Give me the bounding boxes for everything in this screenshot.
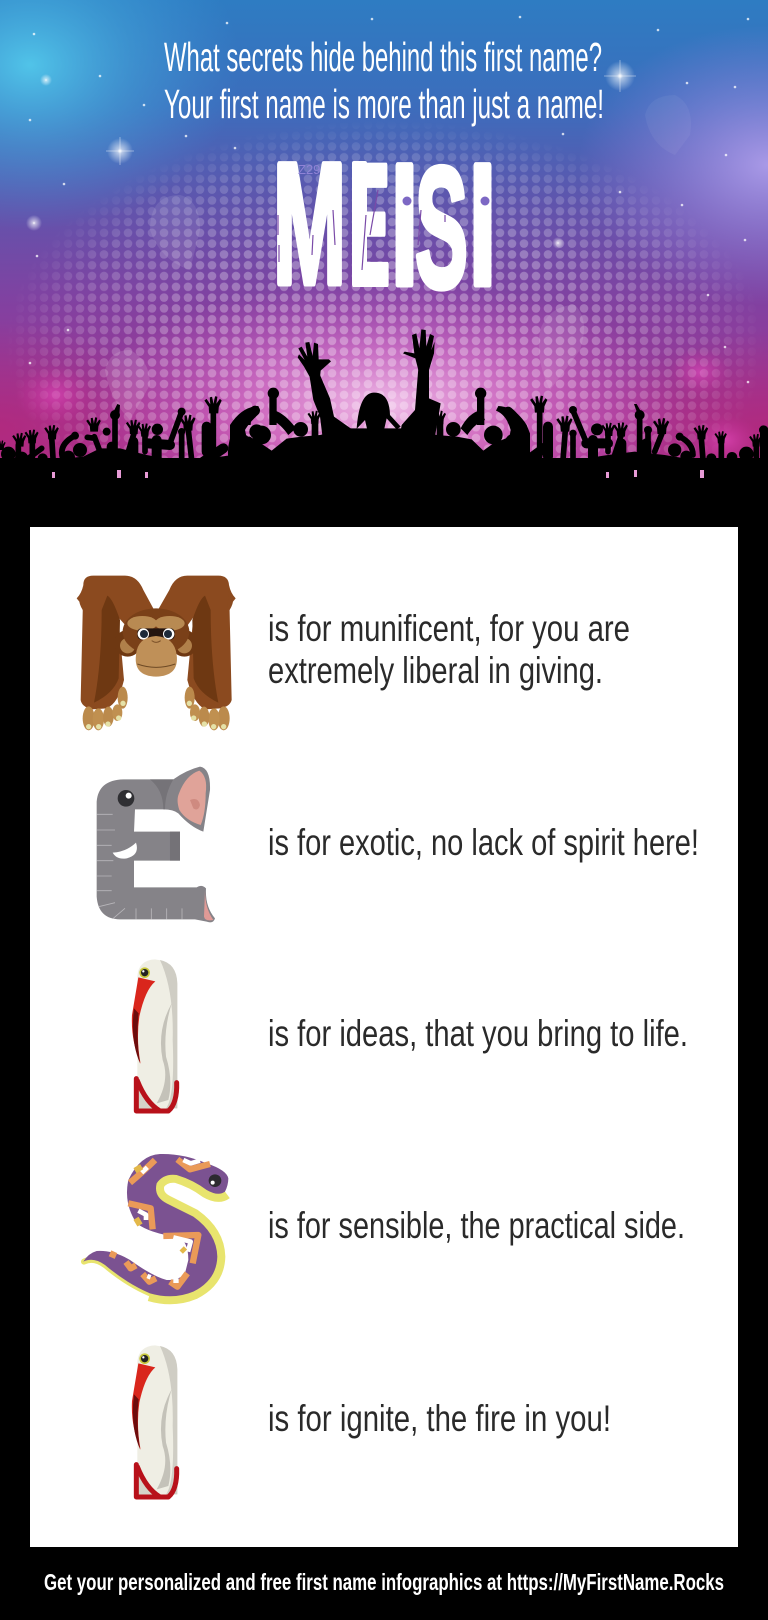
background: concert stage glow (0, 0, 768, 458)
icon: snake letter S (83, 1154, 228, 1296)
crowd left side (0, 396, 264, 480)
title: name MEISI: M (273, 128, 346, 320)
icon: ibis letter I (132, 959, 177, 1111)
title: name MEISI: Z29 (298, 162, 320, 177)
text: I meaning (ignite): is for ignite, the fire in you! (268, 1398, 611, 1439)
title: name MEISI: I (391, 129, 418, 321)
icon: monkey letter M (77, 576, 236, 730)
text: M meaning: extremely liberal in giving. (268, 650, 603, 691)
central figure with raised hands (230, 329, 530, 468)
title: name MEISI: I (469, 129, 496, 321)
crowd right side (504, 396, 768, 480)
text: M meaning (268, 608, 630, 691)
title: name MEISI (273, 128, 496, 324)
title: name MEISI: E (349, 129, 390, 321)
crowd silhouette (0, 329, 768, 530)
text: M meaning: is for munificent, for you are (268, 608, 630, 649)
title: name MEISI: S (415, 132, 468, 324)
icon: ibis letter I (second) (132, 1345, 177, 1497)
small gaps between people (52, 470, 704, 478)
heading: question lines (164, 34, 604, 127)
panel: letter meanings (30, 527, 738, 1547)
sparkling stars (26, 16, 749, 383)
icon: elephant letter E (97, 767, 215, 922)
